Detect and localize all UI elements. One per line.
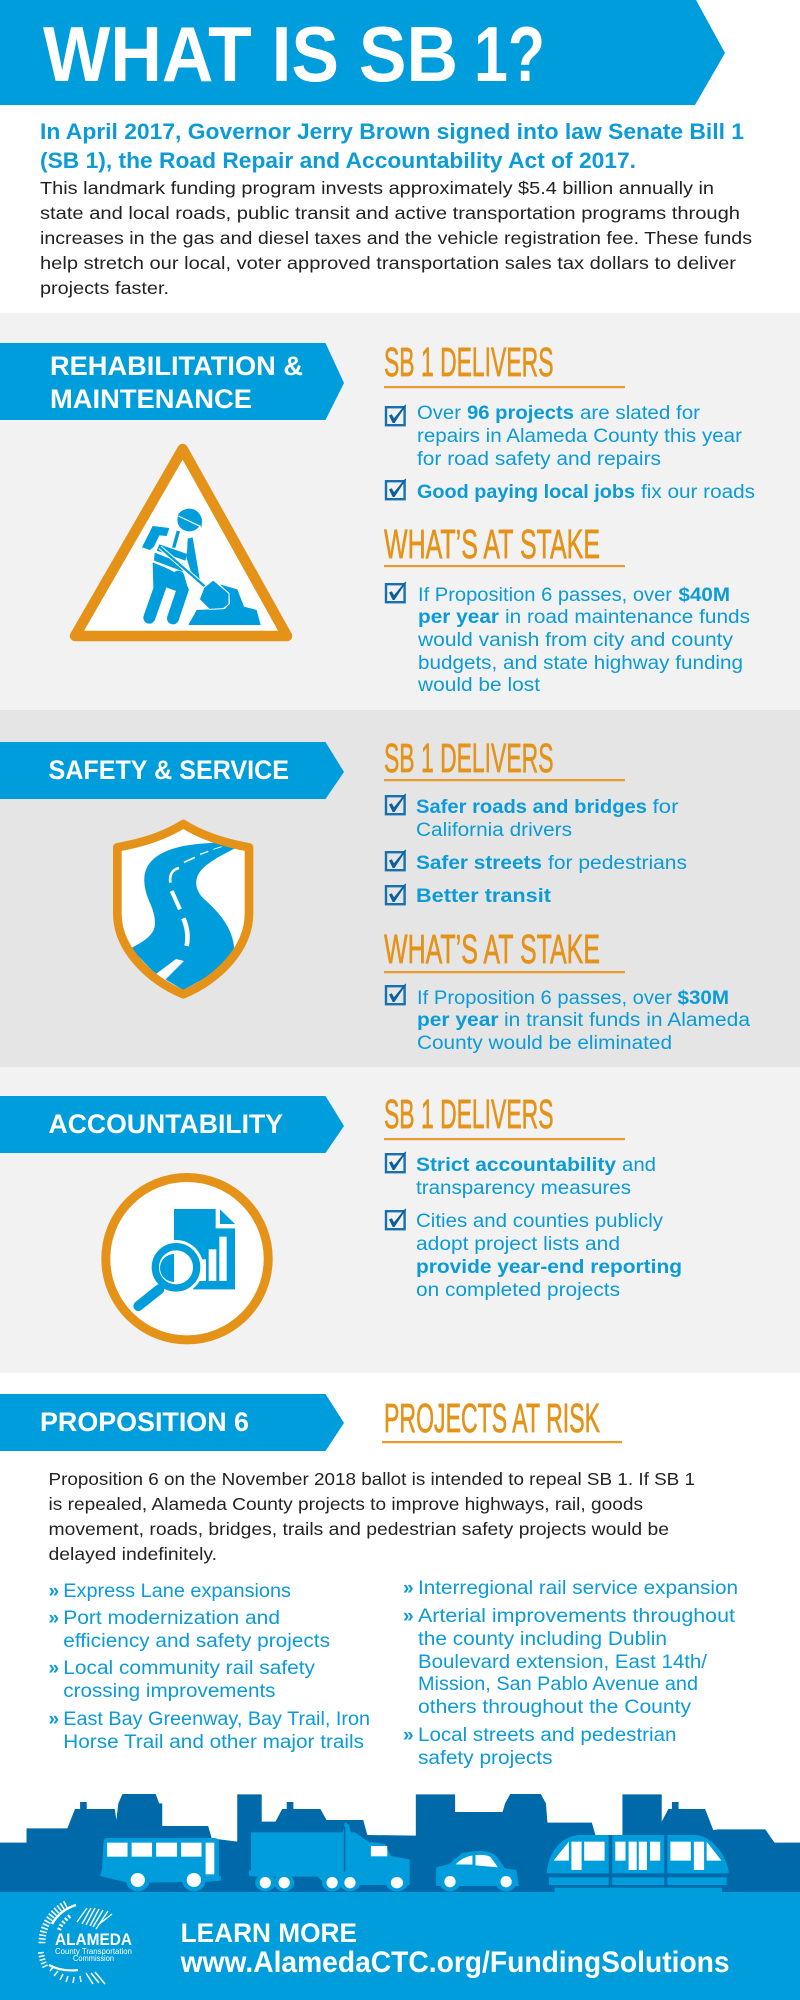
list: projects right column: the county including Dublin <box>418 1629 667 1650</box>
heading: SB 1 delivers: SB 1 DELIVERS <box>384 735 554 781</box>
heading: SB 1 delivers: SB 1 DELIVERS <box>384 339 554 385</box>
list: at stake item: in road maintenance funds <box>505 607 750 628</box>
list: projects left column: crossing improvements <box>63 1681 275 1702</box>
train <box>547 1835 729 1892</box>
car <box>436 1851 519 1891</box>
list: delivers items <box>386 794 687 907</box>
list: delivers items: 96 projects <box>467 403 574 424</box>
banner: rehabilitation and maintenance <box>0 343 344 420</box>
proposition 6 description: Proposition 6 on the November 2018 ballot is intended to repeal SB 1. If SB 1 <box>48 1469 695 1489</box>
panel: accountability <box>0 1091 682 1340</box>
list: at stake item: $30M <box>678 988 729 1009</box>
list: projects right column: » <box>403 1606 414 1627</box>
banner: safety and service <box>0 742 344 799</box>
list: delivers items: for <box>652 797 679 818</box>
list: delivers items: for pedestrians <box>548 853 687 874</box>
list: delivers items <box>386 403 755 503</box>
list: projects left column: Express Lane expansions <box>63 1581 291 1602</box>
list: projects left column: » <box>48 1581 59 1602</box>
intro body text: help stretch our local, voter approved transportation sales tax dollars to deliver <box>40 253 736 273</box>
title: WHAT IS SB <box>43 10 458 98</box>
list: projects right column <box>403 1578 738 1769</box>
list: projects right column: Arterial improvements throughout <box>418 1606 736 1627</box>
intro body text: increases in the gas and diesel taxes and the vehicle registration fee. These funds <box>40 228 752 248</box>
title banner <box>0 0 725 105</box>
banner: rehabilitation and maintenance: MAINTENANCE <box>50 384 252 414</box>
list: projects right column: Boulevard extension, East 14th/ <box>418 1652 708 1673</box>
heading: what's at stake: WHAT’S AT STAKE <box>384 521 600 567</box>
list: delivers items: fix our roads <box>641 482 755 503</box>
logo: Alameda CTC: ALAMEDA <box>55 1930 132 1949</box>
list: at stake item: would vanish from city and county <box>417 630 734 651</box>
list: at stake item: If Proposition 6 passes, over <box>417 988 673 1009</box>
footer band <box>0 1892 800 2000</box>
list: projects left column: efficiency and safety projects <box>63 1631 330 1652</box>
title: 1? <box>474 10 545 98</box>
call to action: learn more <box>180 1918 730 1979</box>
list: at stake item <box>386 984 750 1054</box>
list: projects right column: Mission, San Pablo Avenue and <box>418 1674 698 1695</box>
skyline <box>0 1794 800 1892</box>
banner: accountability: ACCOUNTABILITY <box>48 1109 283 1139</box>
list: projects right column: Interregional rail service expansion <box>418 1578 738 1599</box>
intro lead text <box>40 119 744 173</box>
list: at stake item: budgets, and state highway funding <box>418 653 743 674</box>
list: delivers items: and <box>622 1155 656 1176</box>
list: delivers items: transparency measures <box>416 1178 631 1199</box>
list: delivers items: Cities and counties publicly <box>416 1211 664 1232</box>
list: projects left column: Horse Trail and other major trails <box>63 1732 364 1753</box>
list: at stake item: per year <box>418 607 500 628</box>
intro body text: projects faster. <box>40 278 169 298</box>
intro body text: This landmark funding program invests approximately $5.4 billion annually in <box>40 178 714 198</box>
panel: proposition 6 <box>0 1394 738 1769</box>
list: delivers items: Over <box>417 403 462 424</box>
proposition 6 description: is repealed, Alameda County projects to improve highways, rail, goods <box>48 1494 643 1514</box>
proposition 6 description: delayed indefinitely. <box>48 1544 217 1564</box>
list: delivers items: Good paying local jobs <box>417 482 635 503</box>
banner: accountability <box>0 1096 344 1153</box>
logo: Alameda CTC: Commission <box>73 1953 114 1963</box>
list: at stake item: per year <box>417 1010 499 1031</box>
logo: Alameda CTC <box>41 1904 132 1984</box>
list: projects left column: East Bay Greenway, Bay Trail, Iron <box>63 1709 370 1730</box>
list: delivers items: Strict accountability <box>416 1155 616 1176</box>
list: projects left column: » <box>48 1608 59 1629</box>
list: delivers items: California drivers <box>416 820 572 841</box>
heading: projects at risk: PROJECTS AT RISK <box>384 1395 600 1441</box>
list: at stake item: $40M <box>678 585 730 606</box>
heading: SB 1 delivers: SB 1 DELIVERS <box>384 1091 554 1137</box>
list: delivers items: on completed projects <box>416 1280 620 1301</box>
intro body text: state and local roads, public transit and active transportation programs through <box>40 203 740 223</box>
list: projects right column: others throughout the County <box>418 1697 692 1718</box>
list: projects left column: Port modernization and <box>63 1608 280 1629</box>
proposition 6 description <box>48 1469 695 1564</box>
list: at stake item: County would be eliminated <box>417 1033 672 1054</box>
list: projects left column: Local community rail safety <box>63 1658 316 1679</box>
list: projects left column: » <box>48 1709 59 1730</box>
icon: road worker warning sign <box>75 449 287 636</box>
logo: Alameda CTC: County Transportation <box>55 1946 132 1956</box>
banner: proposition 6 <box>0 1394 344 1451</box>
list: projects right column: » <box>403 1725 414 1746</box>
icon: road shield <box>117 824 249 994</box>
list: projects right column: Local streets and pedestrian <box>418 1725 676 1746</box>
list: delivers items: for road safety and repairs <box>417 449 661 470</box>
list: delivers items: provide year-end reporting <box>416 1257 682 1278</box>
heading: what's at stake: WHAT’S AT STAKE <box>384 926 600 972</box>
list: delivers items: repairs in Alameda County this year <box>417 426 743 447</box>
list: delivers items: are slated for <box>580 403 701 424</box>
list: at stake item: would be lost <box>417 675 541 696</box>
list: projects left column: » <box>48 1658 59 1679</box>
list: delivers items: adopt project lists and <box>416 1234 620 1255</box>
list: delivers items: Safer roads and bridges <box>416 797 647 818</box>
intro body text <box>40 178 752 298</box>
banner: proposition 6: PROPOSITION 6 <box>40 1407 249 1437</box>
illustration: city skyline with vehicles <box>0 1794 800 1892</box>
truck <box>249 1822 410 1891</box>
intro lead text: In April 2017, Governor Jerry Brown signed into law Senate Bill 1 <box>40 119 744 144</box>
list: delivers items <box>386 1152 682 1301</box>
list: at stake item <box>386 582 750 696</box>
panel: safety and service <box>0 735 750 1054</box>
proposition 6 description: movement, roads, bridges, trails and pedestrian safety projects would be <box>48 1519 669 1539</box>
list: delivers items: Safer streets <box>416 853 542 874</box>
list: at stake item: If Proposition 6 passes, over <box>418 585 673 606</box>
panel: rehabilitation and maintenance <box>0 339 755 696</box>
list: projects left column <box>48 1581 370 1753</box>
list: delivers items: Better transit <box>416 886 552 907</box>
banner: safety and service: SAFETY & SERVICE <box>48 755 289 785</box>
list: projects right column: safety projects <box>418 1748 552 1769</box>
banner: rehabilitation and maintenance: REHABILITATION & <box>50 351 303 381</box>
list: projects right column: » <box>403 1578 414 1599</box>
call to action: learn more: LEARN MORE <box>181 1918 357 1948</box>
list: at stake item: in transit funds in Alameda <box>504 1010 750 1031</box>
call to action: learn more: www.AlamedaCTC.org/FundingSolutions <box>180 1946 730 1979</box>
bus <box>100 1838 221 1891</box>
intro lead text: (SB 1), the Road Repair and Accountability Act of 2017. <box>40 148 636 173</box>
icon: report and magnifying glass <box>106 1178 268 1340</box>
